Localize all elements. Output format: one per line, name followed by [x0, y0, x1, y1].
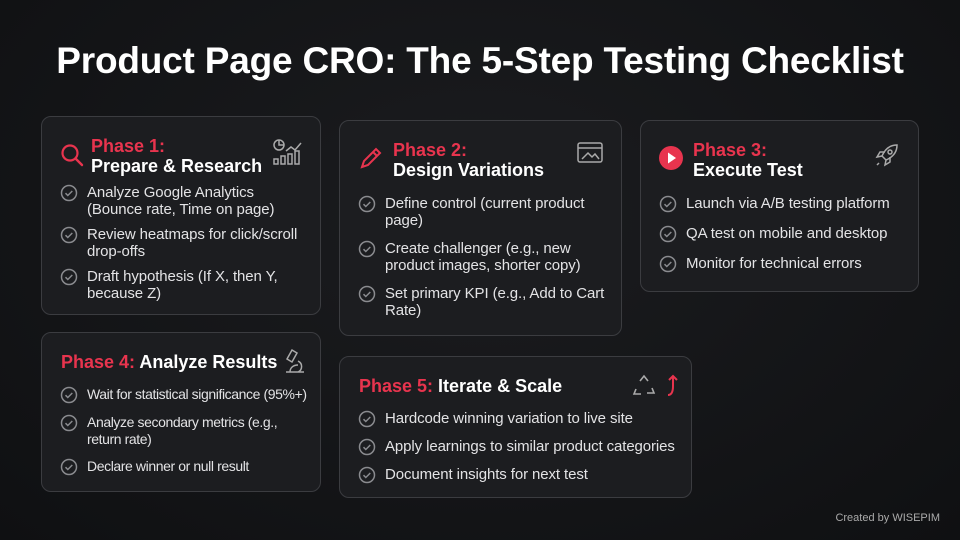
checklist: QA test on mobile and desktop — [686, 225, 887, 242]
panel: phase 2 — [339, 120, 622, 336]
heading: Phase 3: — [693, 140, 767, 160]
heading: Prepare & Research — [91, 156, 262, 176]
panel: phase 5 — [339, 356, 692, 498]
panel: phase 1 — [41, 116, 321, 315]
icon: play — [659, 146, 683, 170]
checklist: Analyze secondary metrics (e.g., — [87, 414, 277, 430]
heading — [91, 136, 262, 176]
icon: magnifier — [61, 144, 84, 166]
checklist: Monitor for technical errors — [686, 255, 862, 272]
checklist: return rate) — [87, 431, 151, 447]
icon: pencil — [360, 148, 382, 169]
checklist: Declare winner or null result — [87, 458, 249, 474]
icon: image frame — [577, 142, 603, 163]
heading: Phase 4: Analyze Results — [61, 352, 277, 372]
icon: rocket — [876, 144, 898, 166]
checklist — [60, 386, 307, 476]
checklist: Wait for statistical significance (95%+) — [87, 386, 307, 402]
checklist — [358, 195, 604, 319]
checklist: Create challenger (e.g., new product images, shorter copy) — [385, 240, 581, 274]
checklist: Review heatmaps for click/scroll drop-offs — [87, 226, 297, 260]
title: Product Page CRO: The 5-Step Testing Checklist — [56, 40, 904, 81]
heading: Phase 5: Iterate & Scale — [359, 376, 562, 396]
checklist: Analyze Google Analytics (Bounce rate, Time on page) — [87, 184, 274, 218]
checklist — [660, 195, 890, 272]
checklist: Document insights for next test — [385, 466, 588, 483]
checklist: Apply learnings to similar product categories — [385, 438, 675, 455]
checklist: Set primary KPI (e.g., Add to Cart Rate) — [385, 285, 604, 319]
heading — [393, 140, 544, 180]
heading: Phase 2: — [393, 140, 467, 160]
checklist: Define control (current product page) — [385, 195, 584, 229]
checklist: Draft hypothesis (If X, then Y, because Z) — [87, 268, 278, 302]
checklist: Launch via A/B testing platform — [686, 195, 890, 212]
icon: recycle and arrow — [632, 374, 678, 396]
heading: Phase 1: — [91, 136, 165, 156]
panel: phase 4 — [41, 332, 321, 492]
icon: microscope — [286, 349, 304, 373]
heading — [693, 140, 803, 180]
checklist — [60, 184, 297, 302]
heading: Execute Test — [693, 160, 803, 180]
checklist: Hardcode winning variation to live site — [385, 410, 633, 427]
panel: phase 3 — [640, 120, 919, 292]
credit: Created by WISEPIM — [835, 512, 940, 524]
icon: chart — [273, 139, 302, 165]
checklist — [358, 410, 675, 484]
heading: Design Variations — [393, 160, 544, 180]
